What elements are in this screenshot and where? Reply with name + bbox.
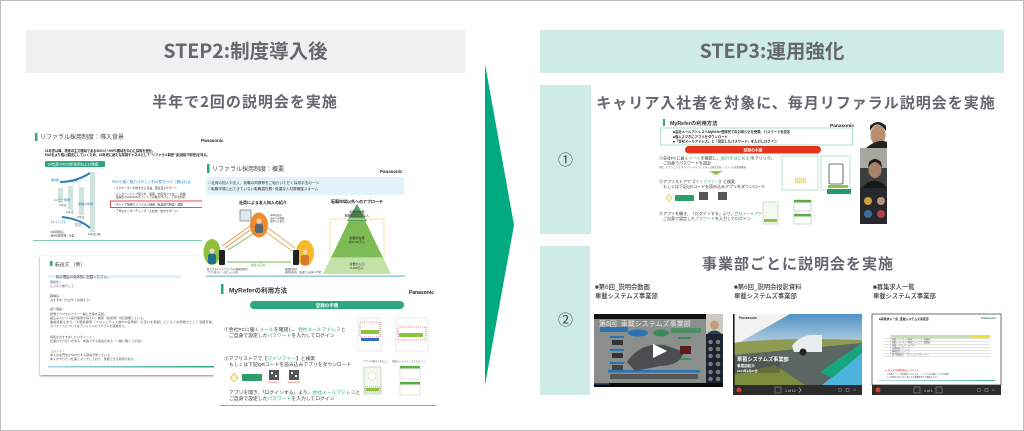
video call participants (860, 122, 887, 224)
panel: item 1: ① (558, 149, 573, 170)
slide: referral overview: □ 社員の知人や友人、前職の同僚等をご紹介いただく採用手法の一つ (208, 180, 319, 185)
diagram: referral triangle: SNSの紹介 (270, 213, 283, 217)
icon: play (653, 344, 667, 358)
bar chart: 拡充 (71, 178, 78, 183)
icon: app download and QR codes: ↑Androidの方 (287, 380, 301, 384)
slide: job sheet card: コメント： (50, 349, 65, 353)
screenshots: login screens (358, 318, 428, 395)
slide: referral overview: 転職市場以外へのアプローチ (331, 198, 383, 204)
heading: STEP3: STEP3:運用強化 (700, 35, 845, 64)
slide: referral overview: リファラル採用制度：概要 (212, 165, 284, 173)
heading: STEP2: STEP2:制度導入後 (163, 35, 328, 64)
slide thumbnail: job list: ▲ 求人の詳細情報はこちらです (885, 368, 920, 372)
diagram: referral triangle: 採用への協力 (270, 219, 285, 223)
table: 電子回路設計・プロジェクトマネージャー (892, 352, 930, 356)
bar chart: 21年度 (59, 203, 67, 207)
slide: MyRefer online session: ご自身で設定したパスワードを入力してログイン (663, 215, 751, 221)
screenshots: login screens: 登録メールアドレスでログイン (392, 359, 426, 363)
slide: job sheet card: 本人のやりたい仕事とマッチしており、受容できる環境がある (50, 356, 134, 361)
panel: step2 slide collage (33, 128, 438, 408)
slide: job sheet card: 転送文 （例） (55, 261, 85, 268)
slide: referral overview: □ 転職市場に出てきていない転職潜在層 / 貴重な人材層確保スキーム (208, 186, 319, 191)
icon: app download and QR codes (230, 370, 301, 384)
slide: job sheet card: 仕事のやりがいがある／成長できる環境がある／一緒に働く人が良い (50, 338, 143, 343)
bar chart: ・採用可能領域・企業 (48, 234, 74, 238)
diagram: referral triangle: アプリ及びインタビュー対応 (207, 270, 239, 274)
bar chart: 22年度 (66, 210, 74, 214)
diagram: referral triangle: 候補者招待 (285, 267, 298, 271)
label: job list: ■募集求人一覧 (873, 282, 915, 291)
slide: introduction background: ・キャリア採用でリファラル採用（社員紹介制度）展開 (113, 202, 183, 206)
viewer bar: 1 of 1 (924, 389, 933, 393)
slide: MyRefer usage: 登録の手順 (316, 302, 339, 309)
slide thumbnail: job list: Panasonic (981, 316, 996, 320)
slide thumbnail: job list (872, 314, 1001, 395)
label: video (595, 282, 658, 300)
label: slides: ■第6回_説明会投影資料 (734, 282, 802, 291)
slide: introduction background: 業種色のADAS/AIポイントでの魅力づけと、丁寧な対応 (113, 195, 186, 199)
diagram: talent pyramid: 労働力人口 (349, 261, 365, 266)
bar chart: ・24時間対応 (48, 230, 64, 234)
diagram: referral triangle: 相談と応対 (251, 263, 265, 267)
slide: job sheet card: おすすめ（ちはやく協理する） (50, 297, 92, 302)
label: slides: 車載システムズ事業部 (734, 291, 797, 300)
slide: introduction background: 24年度 PAS方針採用および規模 (48, 162, 99, 166)
slide: MyRefer online session: ①会社PCに届くメールを確認し、[紹介をはじめる]をクリック。 (659, 154, 774, 160)
slide thumbnail: job list: ■募集求人一覧_車載システムズ事業部 (879, 316, 929, 321)
label: video: ■第6回_説明会動画 (595, 282, 650, 291)
slide: referral overview (202, 158, 412, 280)
slide: job sheet card: 特別なおすすめしたいポイント： (50, 334, 95, 339)
slide: MyRefer online session: 登録の手順 (744, 148, 763, 152)
slide: referral overview: 社員による友人知人の紹介 (239, 199, 287, 205)
panel: item 1 (540, 85, 591, 234)
slide: MyRefer online session: ②アプリストアで【マイリファー】と検索 (659, 178, 735, 184)
slide: MyRefer online session: もしくは下記QRコードを読み込みアプリをダウンロード (663, 183, 765, 189)
diagram: talent pyramid (323, 204, 391, 274)
slide: introduction background: ・丁寧なオンボーディング（入社前・後のサポート） (113, 209, 180, 213)
bar chart: 24年度計画 (88, 232, 101, 236)
bar chart: 拡充 (75, 222, 82, 227)
slide: job sheet card: 新規でカプセルカラー一緒に仕事を実施。 (50, 311, 107, 316)
icon: app download and QR codes: ↑iPhoneの方 (267, 380, 280, 384)
slide: job sheet card: 組込みカシフト設計開発が得てい、顧客（技術者）対応経験している。 (50, 315, 146, 320)
slide: introduction background (33, 128, 224, 242)
slide: introduction background: 21年度以降、将来の主力領域であるSDV/ミリHPC領域を中心に採用を強化。 (45, 148, 155, 153)
slide: MyRefer online session: MyReferの利用方法 (670, 119, 718, 127)
diagram: talent pyramid: 6,265万人 (350, 266, 364, 270)
slide: MyRefer online session: ■「会社メールアドレス」と「設定したパスワード」を入力しログイン (673, 138, 778, 144)
slide thumbnail: cover: Panasonic (739, 316, 757, 320)
slide: job sheet card: 紹介理由の具体的に記載ください。 (56, 274, 110, 279)
slide thumbnail: job list: 2.ご不明な点がございましたら事務局までご連絡ください (887, 375, 939, 379)
slide: MyRefer online session: ③アプリを開き、「ログインする」より、会社メールアドレスと (659, 210, 774, 216)
screenshots: session slide (666, 156, 851, 224)
heading: STEP2 (26, 30, 465, 73)
label: video: 車載システムズ事業部 (595, 291, 658, 300)
bar chart (48, 172, 101, 238)
bar chart: 【新規】 (49, 177, 61, 182)
diagram: talent pyramid: 転職潜在層 (349, 235, 365, 240)
video thumbnail: 第6回_車載システムズ事業部 (599, 319, 691, 328)
slide: MyRefer online session: Panasonic (830, 123, 854, 129)
slide: MyRefer online session: 送信：パナソニック オートモーティブシステムズ株式会社 リファラル採用事務局 (659, 165, 747, 169)
slide: MyRefer online session: ■個人スマホにアプリをダウンロード (673, 134, 728, 139)
slide: job sheet card: ビジネス仲介して (50, 283, 74, 288)
slide: MyRefer online session: ■会社メールアドレスへMyRefer登録完了のお知らせを受領、パスワードを設定 (673, 129, 791, 134)
slide: introduction background: Panasonic (201, 138, 224, 143)
slide: MyRefer usage: アプリを開き、「ログインする」より、会社メールアドレスと (229, 389, 361, 396)
slide: MyRefer usage (214, 280, 438, 408)
subheading: item 1: キャリア入社者を対象に、毎月リファラル説明会を実施 (596, 92, 996, 113)
diagram: talent pyramid: 約3,000万人 (349, 239, 365, 244)
table: 品質保証エンジニア (892, 346, 910, 350)
heading: STEP3 (540, 30, 1004, 73)
slide: MyRefer usage: ご自身で設定したパスワードを入力してログイン (229, 332, 335, 339)
label: job list (873, 282, 936, 300)
slide: job sheet card (40, 256, 215, 375)
slide: MyRefer usage: Panasonic (409, 290, 434, 296)
slide: MyRefer online session: ご自身でパスワードを設定 (663, 160, 711, 166)
slide: job sheet card: 職種名： (50, 293, 62, 298)
arrow: step2 to step3 (485, 64, 514, 385)
slide: MyRefer usage: ②アプリストアで【マイリファー】と検索 (224, 355, 315, 362)
table: 機構設計エンジニア (892, 350, 910, 354)
label: slides (734, 282, 802, 300)
subheading: step2: 半年で2回の説明会を実施 (152, 91, 338, 112)
slide: MyRefer usage: MyReferの利用方法 (229, 286, 288, 294)
label: job list: 車載システムズ事業部 (873, 291, 936, 300)
slide thumbnail: job list: 1.採用ページ（社内限定）はこちら、リファラル応募についての詳細 (887, 372, 949, 376)
slide: introduction background: PASをより強い集団にしていくため、23年度に新たな採用チャネルとして“リファラル制度”(社員紹介制度)を導入。 (45, 152, 210, 157)
slide thumbnail: cover: 事業部紹介 (737, 363, 755, 368)
video thumbnail (594, 314, 723, 387)
slide: job sheet card: 本人の専門性がSDV化する環境が整っている (50, 352, 110, 357)
slide: job sheet card: 業績経験もあり、大規模開発（プロジェクト人数500名規模）の流れを把握しているため即戦力として活躍可能。 (50, 319, 215, 324)
slide: introduction background: ・リクルーターの増大化と意識、態度及ぶサポート (113, 186, 177, 190)
slide: introduction background: PASで働く魅力づけと人材の惹きつけ（選ばれる (112, 179, 191, 184)
table: 車載ソフトウェア開発エンジニア（制御系） (892, 338, 932, 342)
diagram: talent pyramid: 転職意向高まる人 (345, 212, 369, 218)
diagram: referral triangle: 自社への興味 (270, 216, 285, 220)
subheading: item 2: 事業部ごとに説明会を実施 (702, 253, 894, 274)
slide: MyRefer usage: もしくは下記QRコードを読み込みアプリをダウンロード (229, 361, 352, 368)
screenshots: login screens: アプリが表示されたら (363, 359, 388, 363)
diagram: talent pyramid: 転職顕在層 (349, 209, 365, 214)
panel: item 2: ② (558, 309, 573, 330)
diagram: referral triangle: 連携を経由、面談から応募へ代替 (285, 270, 321, 274)
slide: referral overview: Panasonic (380, 169, 403, 174)
slide: MyRefer usage: ①会社PCに届くメールを確認し、会社メールアドレスと (224, 326, 346, 333)
table: 車載ソフトウェア開発エンジニア（基盤系） (892, 340, 932, 344)
slide: job sheet card: 関係性： (50, 279, 62, 284)
slide thumbnail: cover (733, 314, 862, 395)
slide: job sheet card: 紹介理由： (50, 306, 65, 311)
table (884, 335, 990, 357)
bar chart: 【キャリア】 (49, 219, 67, 224)
viewer bar: 1 of 12 (785, 389, 796, 393)
slide: introduction background: リファラル採用制度：導入背景 (40, 133, 124, 141)
diagram: referral triangle: 新たなスキルでアプリでの候補者招待 (207, 267, 248, 271)
slide thumbnail: cover: 車載システムズ事業部 (737, 355, 790, 363)
bar chart: 車載AI領域 (78, 201, 93, 206)
slide: introduction background: ・インターンシップ受入れ、連携、内定者フォロー、各種 (113, 192, 186, 196)
table: 車載システムアーキテクト (892, 344, 916, 348)
bar chart: 4Cモ一領域 (54, 197, 70, 202)
slide thumbnail: cover: 2024年4月27日 (737, 368, 758, 373)
slide: MyRefer online session (659, 119, 887, 224)
slide: job sheet card: ガバナンスについてはアジャイルのスクラムを経験あり。 (50, 323, 127, 328)
diagram: referral triangle (204, 210, 321, 274)
panel: item 2 (540, 246, 590, 395)
bar chart: 23年度 (77, 215, 85, 219)
slide: MyRefer usage: ご自身で設定したパスワードを入力してログイン (229, 395, 335, 402)
